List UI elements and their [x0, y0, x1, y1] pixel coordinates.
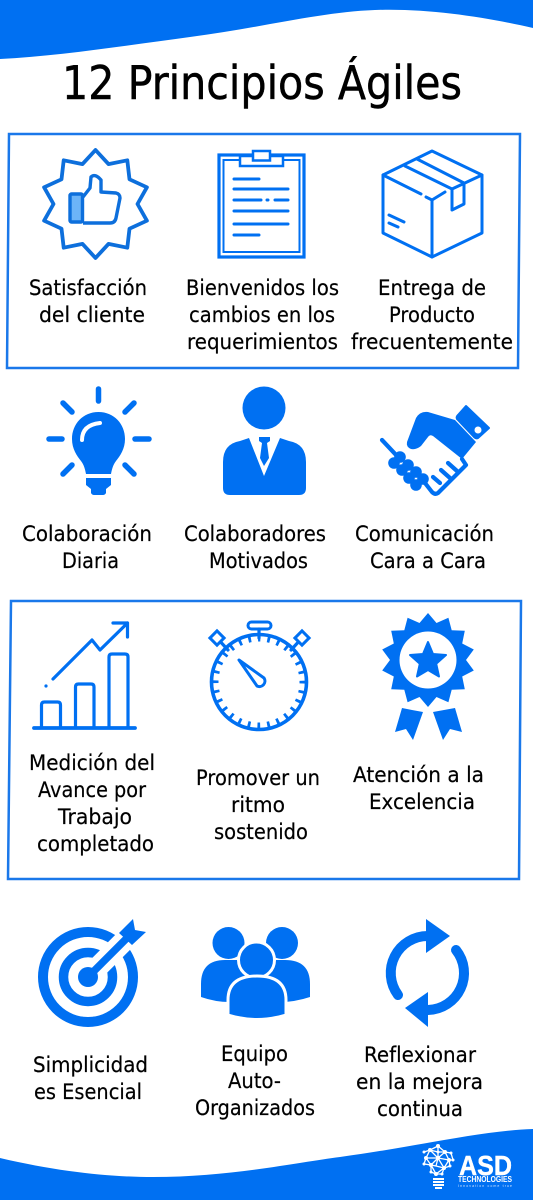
principle: Colaboración Diaria	[22, 389, 152, 574]
wordmark: ASD	[459, 1150, 512, 1181]
label	[29, 276, 147, 328]
icon: light bulb	[49, 389, 149, 495]
principle: Equipo Auto-Organizados	[195, 927, 315, 1121]
label	[22, 522, 152, 574]
label: Equipo	[221, 1042, 288, 1067]
label: Motivados	[209, 549, 308, 574]
label: Promover un	[196, 766, 320, 791]
label: Cara a Cara	[370, 549, 486, 574]
top wave banner	[0, 0, 533, 59]
label: Avance por	[38, 778, 146, 803]
icon: group of people	[201, 927, 310, 1020]
icon: package box	[383, 151, 482, 257]
label: Medición del	[29, 751, 155, 776]
title: 12 Principios Ágiles	[62, 56, 462, 110]
label: Producto	[389, 303, 475, 328]
principle: Satisfacción del cliente	[29, 150, 147, 328]
panel: third row of principles	[8, 601, 521, 879]
label: Excelencia	[369, 790, 475, 815]
label: Satisfacción	[29, 276, 147, 301]
label	[196, 766, 320, 845]
principle: Entrega de Producto	[351, 151, 513, 355]
icon: growth bar chart	[34, 623, 135, 728]
label: Auto-	[228, 1069, 281, 1094]
principle: Medición del Avance	[29, 623, 155, 857]
section: fourth row of principles	[33, 919, 483, 1122]
label: en la mejora	[356, 1070, 483, 1095]
label: Reflexionar	[364, 1043, 476, 1068]
label	[33, 1053, 148, 1105]
icon: person in suit	[223, 386, 306, 495]
principle: Colaboradores Motivados	[184, 386, 326, 574]
label: cambios en los	[189, 303, 335, 328]
section: second row of principles	[22, 386, 494, 574]
principle: Bienvenidos los cambios	[186, 151, 339, 355]
label: Organizados	[195, 1096, 315, 1121]
label	[356, 1043, 483, 1122]
label	[195, 1042, 315, 1121]
principle: Atención a la Excelencia	[353, 613, 484, 815]
label: Atención a la	[353, 763, 484, 788]
label	[353, 763, 484, 815]
label	[186, 276, 339, 355]
bottom wave banner	[0, 1129, 533, 1200]
icon: clipboard	[219, 151, 304, 257]
icon: award rosette	[382, 613, 474, 740]
label: frecuentemente	[351, 330, 513, 355]
label: Colaboradores	[184, 522, 326, 547]
label: Entrega de	[378, 276, 486, 301]
panel: first row of principles	[7, 134, 520, 368]
label: completado	[37, 832, 154, 857]
label: Simplicidad	[33, 1053, 148, 1078]
label	[29, 751, 155, 857]
principle: Promover un ritmo sostenido	[196, 622, 320, 845]
wordmark: Innovation come true	[458, 1184, 512, 1188]
label: Comunicación	[355, 522, 494, 547]
label	[355, 522, 494, 574]
icon: stopwatch	[210, 622, 309, 730]
icon: thumbs up badge	[44, 150, 147, 258]
label: sostenido	[214, 820, 308, 845]
label: Diaria	[62, 549, 119, 574]
icon: handshake	[382, 406, 489, 494]
label: ritmo	[231, 793, 285, 818]
label: Colaboración	[22, 522, 152, 547]
label	[351, 276, 513, 355]
icon: network light bulb	[422, 1144, 454, 1189]
label: Bienvenidos los	[186, 276, 339, 301]
label: es Esencial	[34, 1080, 142, 1105]
principle: Reflexionar en la mejora continua	[356, 919, 483, 1122]
icon: target with arrow	[43, 919, 146, 1022]
label: requerimientos	[187, 330, 338, 355]
wordmark: TECHNOLOGIES	[458, 1175, 513, 1184]
label: del cliente	[39, 303, 145, 328]
label	[184, 522, 326, 574]
label: Trabajo	[57, 805, 132, 830]
principle: Simplicidad es Esencial	[33, 919, 148, 1105]
icon: circular arrows	[391, 919, 464, 1027]
logo: ASD Technologies	[422, 1144, 513, 1189]
label: continua	[377, 1097, 463, 1122]
principle: Comunicación Cara a Cara	[355, 406, 494, 574]
